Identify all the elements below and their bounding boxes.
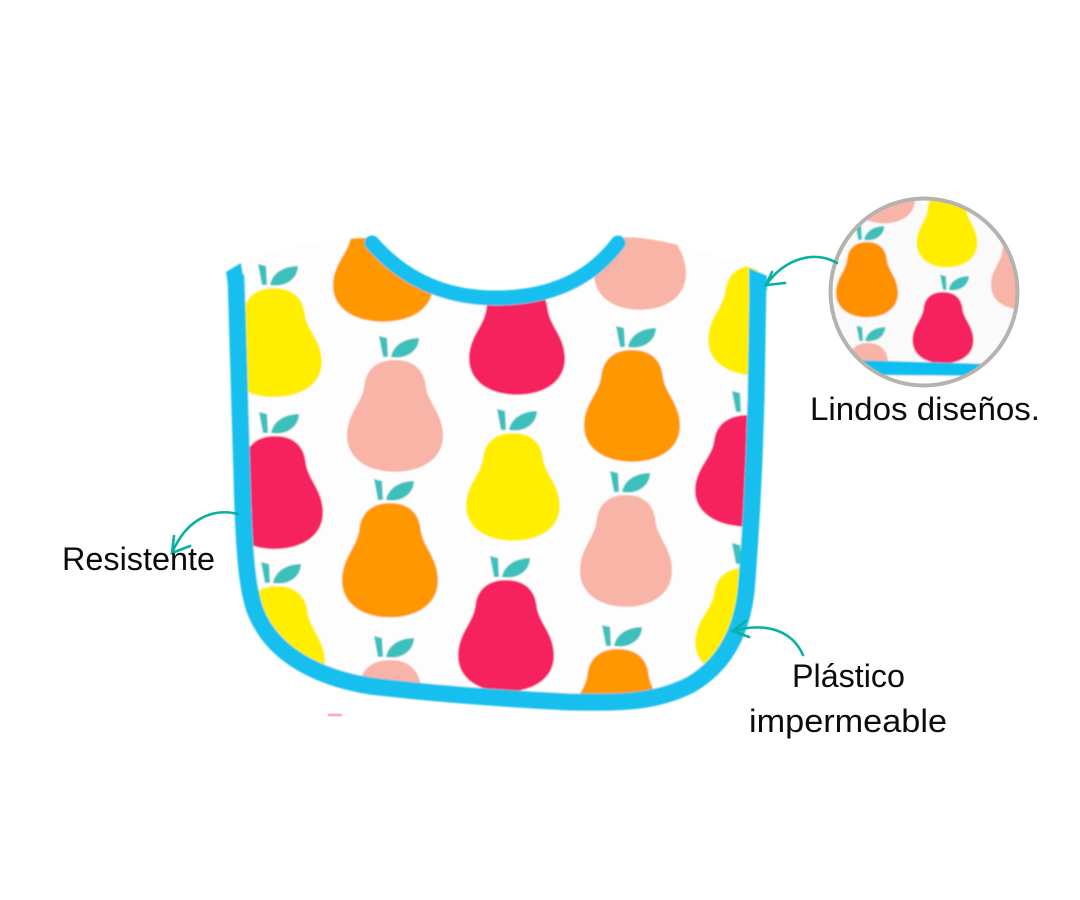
arrow: to detail circle — [766, 257, 837, 285]
label: Resistente: Resistente — [62, 541, 215, 577]
label: Plástico impermeable: impermeable — [749, 703, 947, 739]
infographic canvas — [64, 196, 1037, 738]
arrow: from Plástico label to trim — [733, 621, 803, 655]
bib fabric with pear pattern — [240, 236, 760, 695]
label: Lindos diseños: Lindos diseños. — [810, 391, 1040, 427]
blue trim: top-right corner — [749, 268, 767, 290]
blue trim: neckline — [372, 243, 618, 298]
detail circle: close-up of pattern — [828, 196, 1020, 388]
illustration: fruit-pattern bib — [225, 234, 768, 717]
stray pink mark — [328, 714, 342, 716]
arrow: to Resistente label — [172, 512, 238, 553]
blue trim: outer edge — [236, 275, 758, 702]
label: Plástico impermeable — [749, 658, 947, 739]
label: Plástico impermeable: Plástico — [792, 658, 905, 694]
blue trim: top-left flared corner — [226, 263, 245, 285]
